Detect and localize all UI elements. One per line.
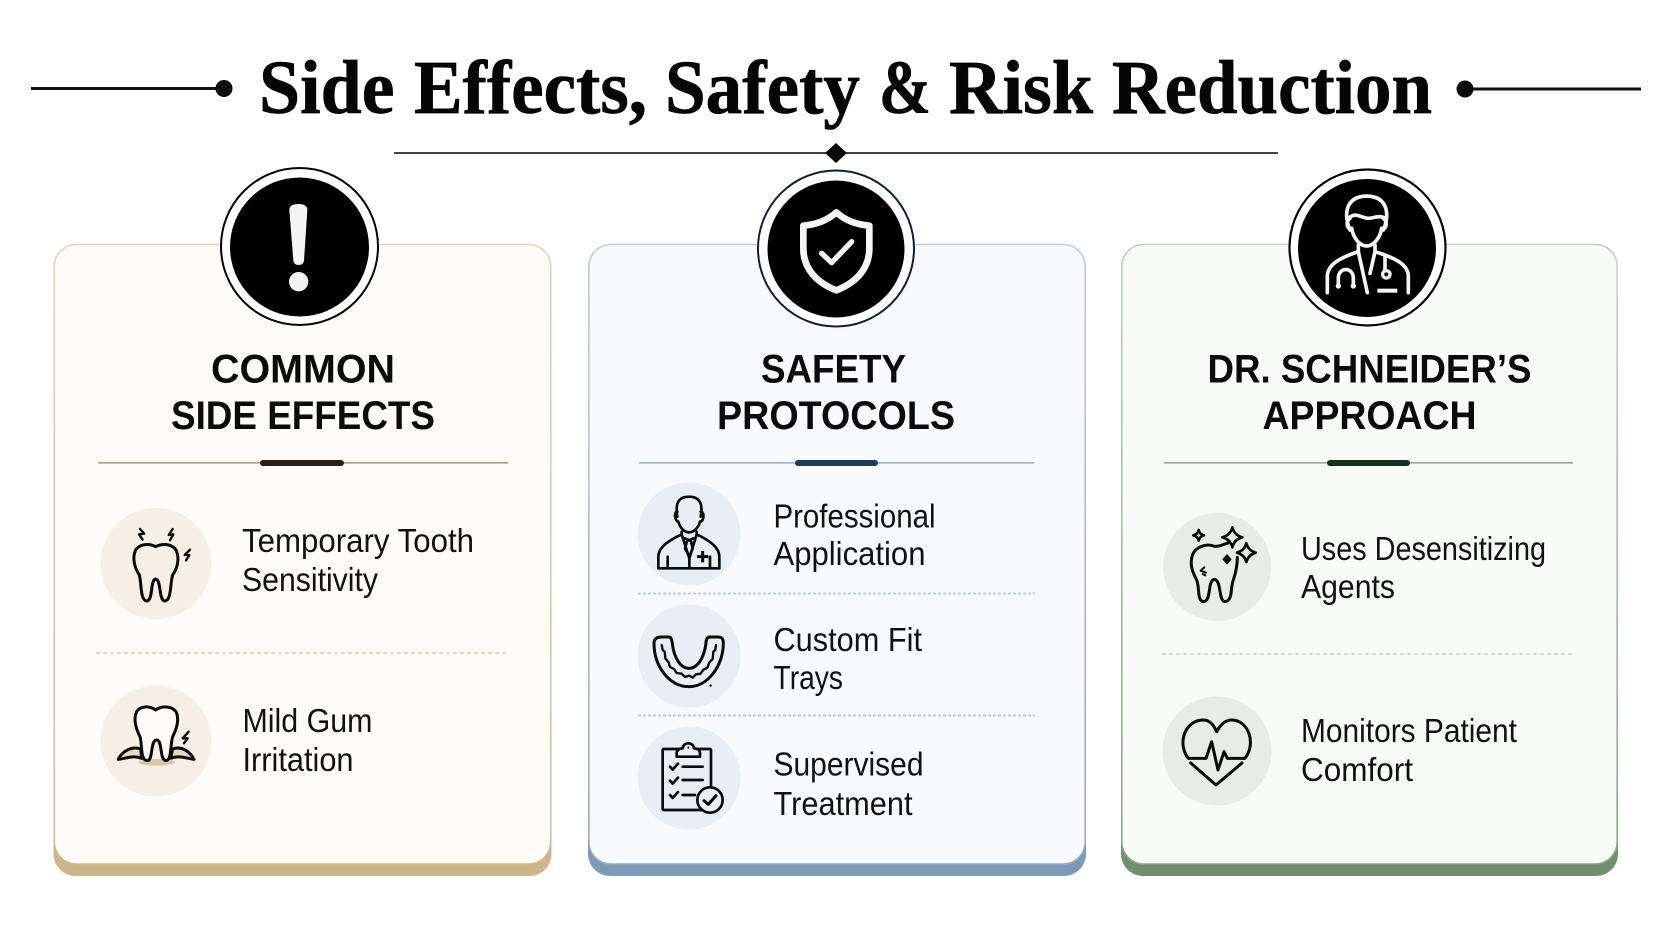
text: Professional	[774, 498, 936, 534]
heading: APPROACH	[1262, 394, 1476, 438]
text: Treatment	[774, 785, 912, 822]
panel: safety protocols	[588, 170, 1086, 876]
icon: dental tray	[638, 604, 740, 708]
text: Application	[774, 535, 926, 572]
title: Side	[259, 46, 394, 130]
title ornament: right line and dot	[1456, 80, 1641, 98]
badge: exclamation	[221, 168, 378, 325]
text: Comfort	[1301, 751, 1413, 788]
icon: sensitive tooth	[100, 508, 212, 619]
text: Monitors Patient	[1301, 712, 1517, 749]
heading rule	[1164, 460, 1573, 466]
text: Supervised	[774, 746, 924, 782]
item: uses desensitizing agents	[1163, 513, 1546, 621]
title: Safety	[665, 46, 860, 130]
heading: DR. SCHNEIDER’S	[1208, 348, 1532, 392]
title	[259, 46, 1432, 130]
item: professional application	[638, 482, 936, 586]
text: Trays	[774, 659, 843, 696]
title: Reduction	[1112, 46, 1432, 130]
icon: heart with pulse	[1162, 696, 1272, 806]
badge: shield	[758, 170, 914, 326]
text: Irritation	[242, 741, 354, 778]
text	[774, 746, 924, 822]
text: Mild Gum	[242, 702, 372, 739]
title underline with diamond	[394, 143, 1278, 163]
text	[1301, 712, 1517, 788]
text: Sensitivity	[242, 561, 378, 598]
heading rule	[98, 460, 508, 466]
item: custom fit trays	[638, 604, 922, 708]
heading: COMMON	[211, 348, 395, 392]
item: mild gum irritation	[100, 686, 372, 796]
icon: clipboard with check	[638, 726, 740, 830]
card background	[588, 244, 1086, 876]
icon: professional	[638, 482, 740, 586]
text: Uses Desensitizing	[1301, 530, 1546, 567]
title ornament: left line and dot	[31, 80, 232, 97]
heading: SIDE EFFECTS	[171, 394, 435, 438]
text: Custom Fit	[774, 621, 922, 658]
text	[774, 498, 936, 572]
text: Agents	[1301, 568, 1395, 605]
heading rule	[639, 460, 1034, 466]
card background	[54, 244, 552, 876]
badge: doctor	[1290, 170, 1446, 326]
text: Temporary Tooth	[242, 522, 474, 559]
heading: SAFETY	[761, 348, 906, 392]
icon: sparkling tooth	[1163, 513, 1271, 621]
item: monitors patient comfort	[1162, 696, 1517, 806]
text	[1301, 530, 1546, 605]
text	[242, 522, 474, 598]
text	[242, 702, 372, 778]
panel: common side effects	[54, 168, 552, 876]
item: supervised treatment	[638, 726, 924, 830]
panel: dr. schneider's approach	[1121, 170, 1618, 876]
item: temporary tooth sensitivity	[100, 508, 474, 619]
heading	[1208, 348, 1532, 438]
card background	[1121, 244, 1618, 876]
title: Risk	[949, 46, 1094, 130]
text	[774, 621, 922, 696]
icon: tooth with gums	[100, 686, 212, 796]
title: Effects,	[414, 46, 647, 130]
heading: PROTOCOLS	[717, 394, 955, 438]
title: &	[879, 46, 931, 130]
heading	[717, 348, 955, 438]
heading	[171, 348, 435, 438]
